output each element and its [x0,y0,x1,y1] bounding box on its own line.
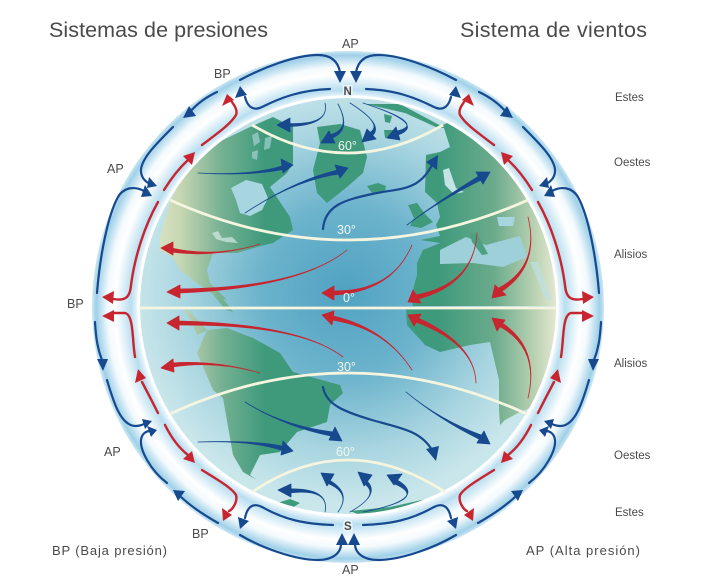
outer arrow to south pole [240,533,348,560]
ring arrows: south east [348,310,601,560]
outer arrow to north pole [350,55,456,83]
legend: low pressure: BP (Baja presión) [52,543,167,558]
inner arrow from north pole [366,86,461,109]
arrow: trade south 5 [492,318,531,398]
ring arrows: north east [350,55,599,304]
arrow: trade north 1 [161,242,260,255]
arrow into 30N high [523,127,555,188]
red mid arrow [501,425,531,463]
arrow: polar north 3 [350,103,376,142]
red arrow to polar low [202,94,237,145]
arrow: trade north 3 [322,245,412,300]
globe [140,98,600,515]
Black Sea [497,217,515,226]
ring arrows: north west [97,55,346,304]
Hudson Bay [231,180,268,216]
latitude labels: 30° [337,223,356,237]
legend: high pressure: AP (Alta presión) [526,543,640,558]
ring arrows: south west [95,310,348,560]
Eurasia and north Africa [412,123,556,306]
Great Lakes [212,231,238,243]
arrow: westerly north 1 [198,159,293,174]
red mid arrow [165,425,195,463]
pressure labels: AP [104,445,121,459]
red arrow to polar low [459,94,494,145]
latitude labels [336,139,357,459]
arrow: trade south 1 [167,316,343,357]
arrow: westerly north 3 [323,155,438,229]
latitude lines [139,125,556,492]
Greenland [313,124,367,203]
pressure labels: AP [342,37,359,51]
latitude labels: 0° [343,291,355,305]
pressure labels: BP [67,297,84,311]
title: wind system: Sistema de vientos [460,18,647,42]
arrow: polar south 2 [321,473,343,512]
wind belt labels [614,92,651,519]
arrow: trade north 4 [408,233,477,303]
wind belt labels: Oestes [614,157,651,169]
North America [160,117,293,300]
Arctic archipelago specks [252,132,272,160]
pressure labels: BP [214,67,231,81]
red mid arrow [164,152,195,190]
red arrow to equator [538,202,594,304]
arrow: westerly south 4 [406,392,490,444]
outer arrow to south pole [348,533,456,560]
wind belt labels: Oestes [614,450,651,462]
arrow: trade north 5 [492,217,531,298]
Arctic sliver [366,104,445,128]
long outer arrow from equator [544,185,599,293]
wind arrows on globe [161,103,531,512]
outer eastward arrow [479,92,513,118]
pole label N: N [344,86,352,98]
arrow: polar south 1 [278,484,326,512]
inner arrow from north pole [235,86,330,109]
wind belt labels: Estes [615,92,644,104]
arrow: westerly south 1 [198,441,293,455]
outer arrow toward south high [173,490,218,523]
arrow: polar north 2 [321,104,344,143]
outer arrow toward south high [478,490,523,523]
red arrow upward [135,369,158,413]
outer arrow from equator [588,322,601,371]
short outer arrow into high [107,380,152,429]
arrow: polar north 1 [277,103,326,132]
arrow: polar south 3 [350,472,372,512]
red arrow to south polar low [202,470,236,521]
British Isles [408,203,433,228]
South America [197,328,343,480]
short outer arrow into high [544,380,589,429]
globe outline [138,96,558,516]
pressure labels: AP [342,563,359,577]
arrow: trade south 4 [408,314,476,383]
arrow: westerly south 2 [245,402,342,441]
red mid arrow [501,152,532,190]
long outer arrow from equator [97,185,152,293]
outer arrow from equator [95,322,108,371]
latitude labels: 60° [336,445,355,459]
red arrow to equator [102,310,135,357]
Baltic [443,168,464,194]
wind belt labels: Alisios [614,249,647,261]
inner arrow from south pole [238,505,333,529]
latitude labels: 60° [338,139,357,153]
red arrow to south polar low [460,470,494,521]
Svalbard islands [384,114,393,139]
Central America [183,295,233,335]
arrow: westerly north 4 [407,172,490,225]
Antarctica [279,499,425,514]
red arrow to equator [561,310,594,357]
arrow into 30N high [141,127,173,188]
arrow: westerly north 2 [245,165,348,213]
arrow: trade north 2 [167,250,347,298]
pressure labels: BP [192,527,209,541]
Italy [470,233,488,255]
red arrow upward [538,369,561,413]
latitude labels: 30° [337,360,356,374]
pressure labels [67,37,359,577]
wind belt labels: Alisios [614,358,647,370]
arrow: westerly south 3 [323,387,439,461]
arrow into 30S high [529,426,555,483]
inner arrow from south pole [363,505,458,529]
arrow: polar south 4 [363,474,408,512]
pole label S: S [344,521,352,533]
pressure ring [92,51,604,563]
outer arrow to north pole [240,55,346,83]
Mediterranean [440,236,527,267]
arrow into 30S high [141,426,167,483]
continents [160,104,556,514]
title: pressure systems: Sistemas de presiones [49,18,268,42]
outer westward arrow [183,92,217,118]
red arrow to equator [102,202,158,304]
Red Sea [530,262,552,300]
pressure labels: AP [107,162,124,176]
arrow: trade south 3 [322,311,412,370]
arrow: trade south 2 [161,359,260,373]
wind belt labels: Estes [615,507,644,519]
arrow: polar north 4 [363,103,407,140]
south Africa [406,309,556,425]
Iceland [367,183,386,193]
